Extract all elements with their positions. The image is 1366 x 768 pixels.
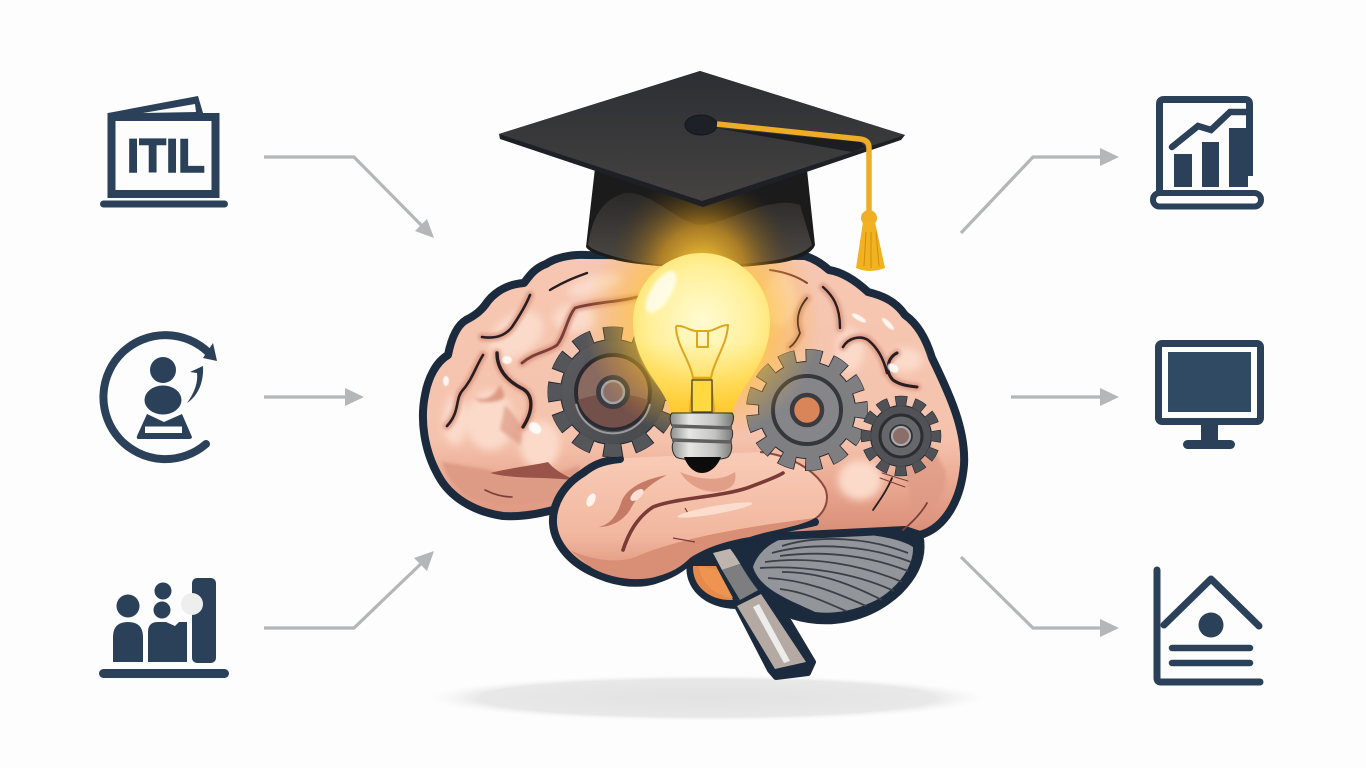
tassel (717, 124, 885, 271)
bulb tip (684, 457, 721, 473)
icon: team and bar (99, 578, 229, 678)
icon: analytics laptop (1153, 100, 1261, 206)
icon: person in lifecycle arrow (103, 335, 217, 459)
gear: middle (753, 356, 861, 464)
brain stem (689, 540, 813, 677)
icon: monitor (1155, 340, 1264, 449)
main brain hemisphere (423, 255, 964, 540)
gear: small (866, 401, 936, 471)
ground shadow (429, 675, 985, 721)
cap board (499, 71, 905, 207)
bulb glow (584, 204, 820, 440)
lower temporal lobe (553, 452, 827, 583)
arrow: brain to house chart (961, 557, 1119, 637)
arrow: brain to analytics (961, 148, 1119, 233)
arrow: brain to monitor (1011, 388, 1119, 406)
ITIL label: ITIL (127, 129, 205, 182)
bulb glass (633, 253, 770, 414)
icon: ITIL book (100, 96, 228, 208)
brain highlights and shading (442, 269, 946, 530)
arrow: team to brain (264, 551, 434, 628)
cap button (685, 115, 717, 135)
light bulb (633, 253, 770, 473)
brain illustration (423, 204, 964, 677)
icon: house chart (1157, 570, 1260, 682)
arrow: service lifecycle to brain (264, 388, 364, 406)
gear: left (554, 334, 672, 450)
cerebellum (730, 525, 922, 622)
bulb screw base (670, 413, 733, 460)
graduation cap (499, 71, 905, 271)
filament (676, 325, 728, 412)
arrow: ITIL to brain (264, 157, 434, 238)
cap body (586, 168, 815, 268)
